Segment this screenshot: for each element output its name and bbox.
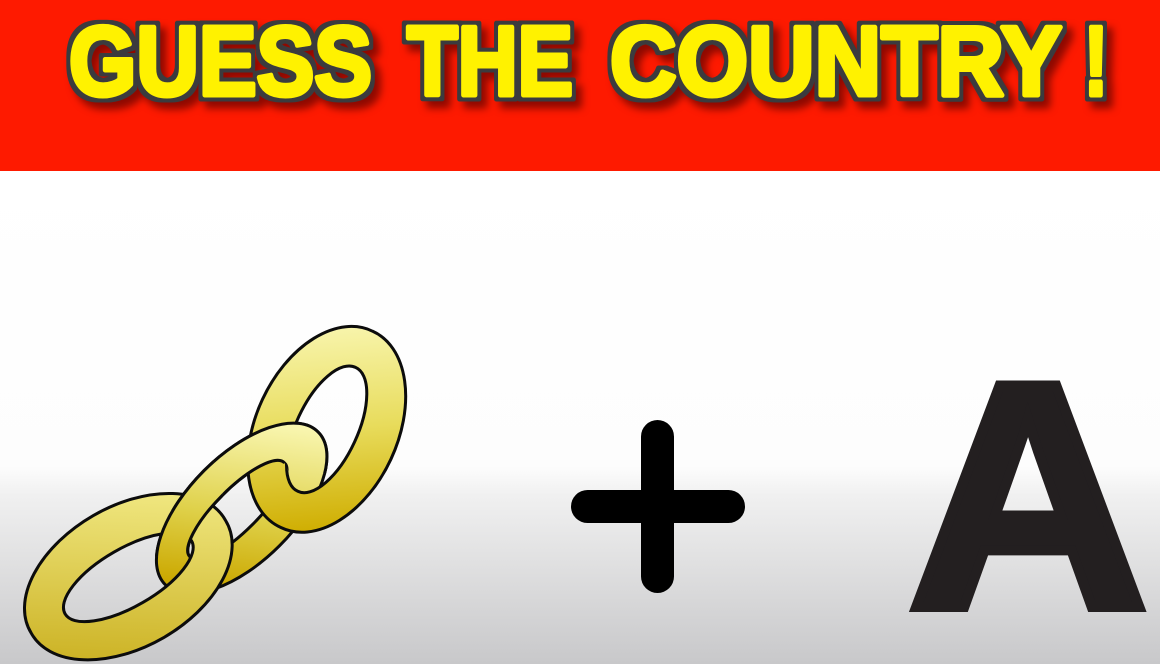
header banner — [0, 0, 1160, 171]
title: THE — [407, 6, 573, 116]
title: ! — [1084, 6, 1108, 116]
title: GUESS — [69, 6, 372, 116]
title: COUNTRY — [610, 6, 1062, 116]
middle link over top link — [171, 422, 328, 510]
icon: plus sign — [571, 420, 745, 593]
top link — [248, 326, 406, 532]
background panel — [0, 170, 1160, 664]
middle link over bottom link — [155, 460, 223, 557]
icon: chain links — [24, 326, 406, 660]
middle link base — [156, 423, 327, 594]
title — [69, 6, 1108, 116]
bottom link — [24, 493, 232, 660]
